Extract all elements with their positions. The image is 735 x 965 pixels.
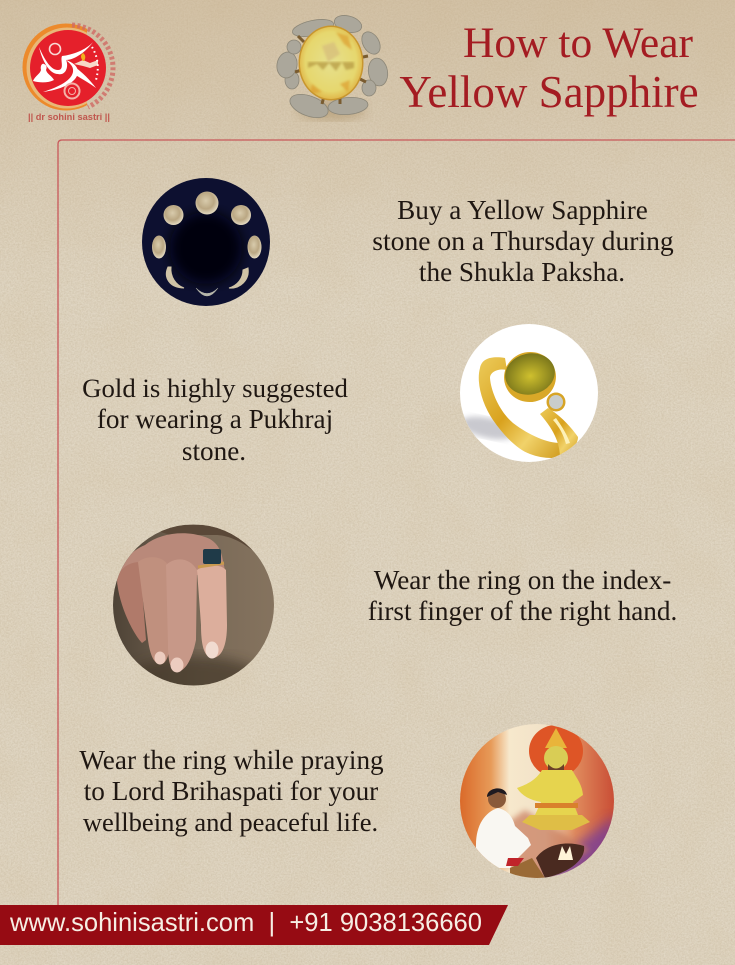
content frame line xyxy=(58,140,735,905)
text: step 2: stone. xyxy=(182,436,246,466)
text: step 1: the Shukla Paksha. xyxy=(419,257,625,287)
text: step 1 xyxy=(372,195,674,287)
title xyxy=(399,19,699,117)
text: step 3: Wear the ring on the index- xyxy=(374,565,671,595)
text: step 1: Buy a Yellow Sapphire xyxy=(397,195,648,225)
text: step 2: Gold is highly suggested xyxy=(82,373,348,403)
logo xyxy=(22,24,113,122)
text: step 4 xyxy=(79,745,384,837)
text: step 2: for wearing a Pukhraj xyxy=(97,404,333,434)
icon: moon phases xyxy=(142,178,270,306)
title: How to Wear xyxy=(463,19,694,67)
icon: hand with ring xyxy=(113,524,274,686)
text: step 4: Wear the ring while praying xyxy=(79,745,384,775)
text: step 1: stone on a Thursday during xyxy=(372,225,674,256)
text: step 4: to Lord Brihaspati for your xyxy=(84,776,378,806)
contact banner: www.sohinisastri.com | +91 9038136660 xyxy=(9,907,482,937)
icon: prayer to Lord Brihaspati xyxy=(460,724,616,880)
text: step 3: first finger of the right hand. xyxy=(368,596,677,626)
text: step 2 xyxy=(82,373,348,466)
logo: || dr sohini sastri || xyxy=(28,112,110,122)
text: step 4: wellbeing and peaceful life. xyxy=(83,807,378,837)
icon: gold ring xyxy=(459,324,598,462)
ring photo: header yellow sapphire xyxy=(275,13,390,122)
text: step 3 xyxy=(368,565,677,626)
title: Yellow Sapphire xyxy=(399,67,699,117)
